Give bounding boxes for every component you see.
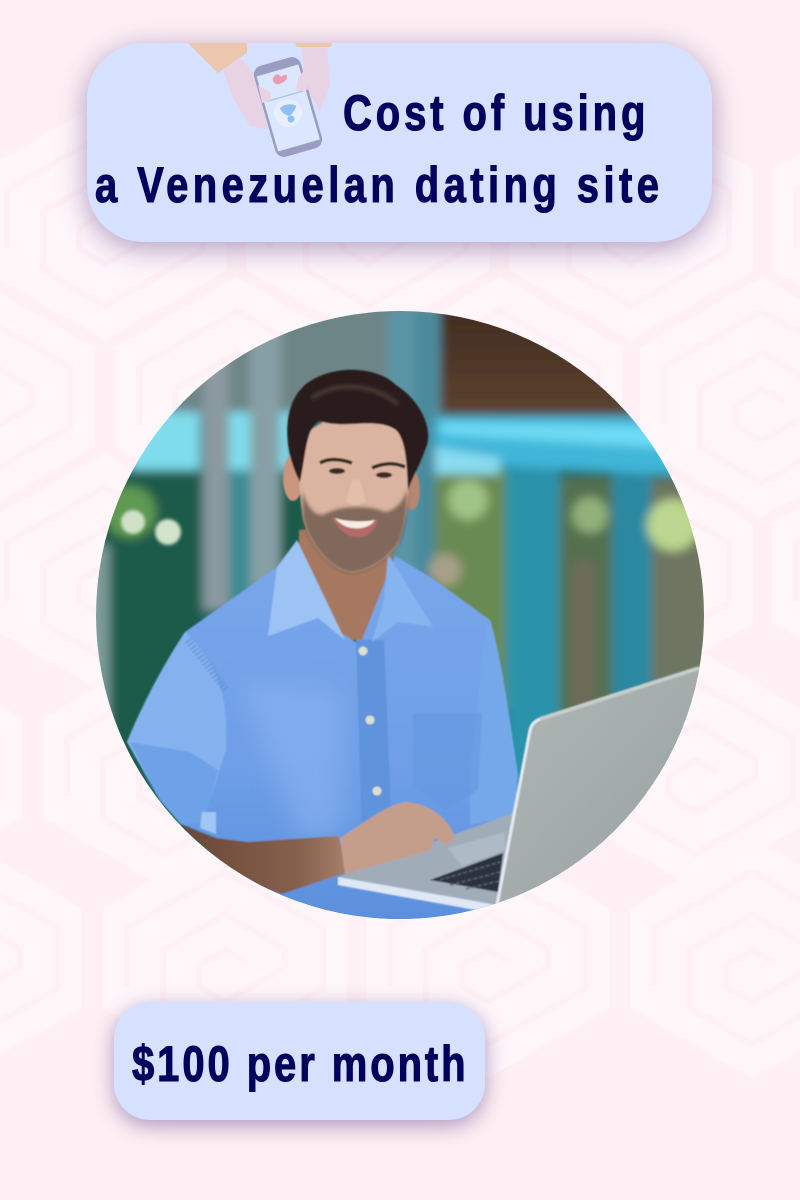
laptop lid [497,667,720,905]
title text line 1: Cost of using [343,85,645,141]
face [299,418,409,573]
price panel card [114,1002,485,1120]
man: head [283,370,428,573]
man: shirt body [127,556,518,925]
title panel card [87,43,712,242]
hair [287,370,428,490]
man: hand [340,802,455,874]
title text line 2: a Venezuelan dating site [95,157,659,213]
photo background: blurred terrace [90,300,712,940]
man: neck [299,520,395,640]
beard [302,488,407,573]
man: forearm [178,824,348,894]
nose [347,480,365,504]
icon: hands holding phone [188,43,332,158]
price panel shadow [114,1008,485,1126]
eyes and brows [320,460,352,463]
title panel shadow [87,49,712,248]
man: figure [127,370,720,925]
bokeh highlights [121,510,181,545]
title panel [87,43,712,248]
laptop base [338,813,513,912]
shirt details [127,540,518,840]
price panel [114,1002,485,1126]
price text: $100 per month [132,1036,466,1092]
ears [283,455,303,501]
mouth [332,517,378,537]
photo: smiling man with laptop in circle [90,300,720,940]
